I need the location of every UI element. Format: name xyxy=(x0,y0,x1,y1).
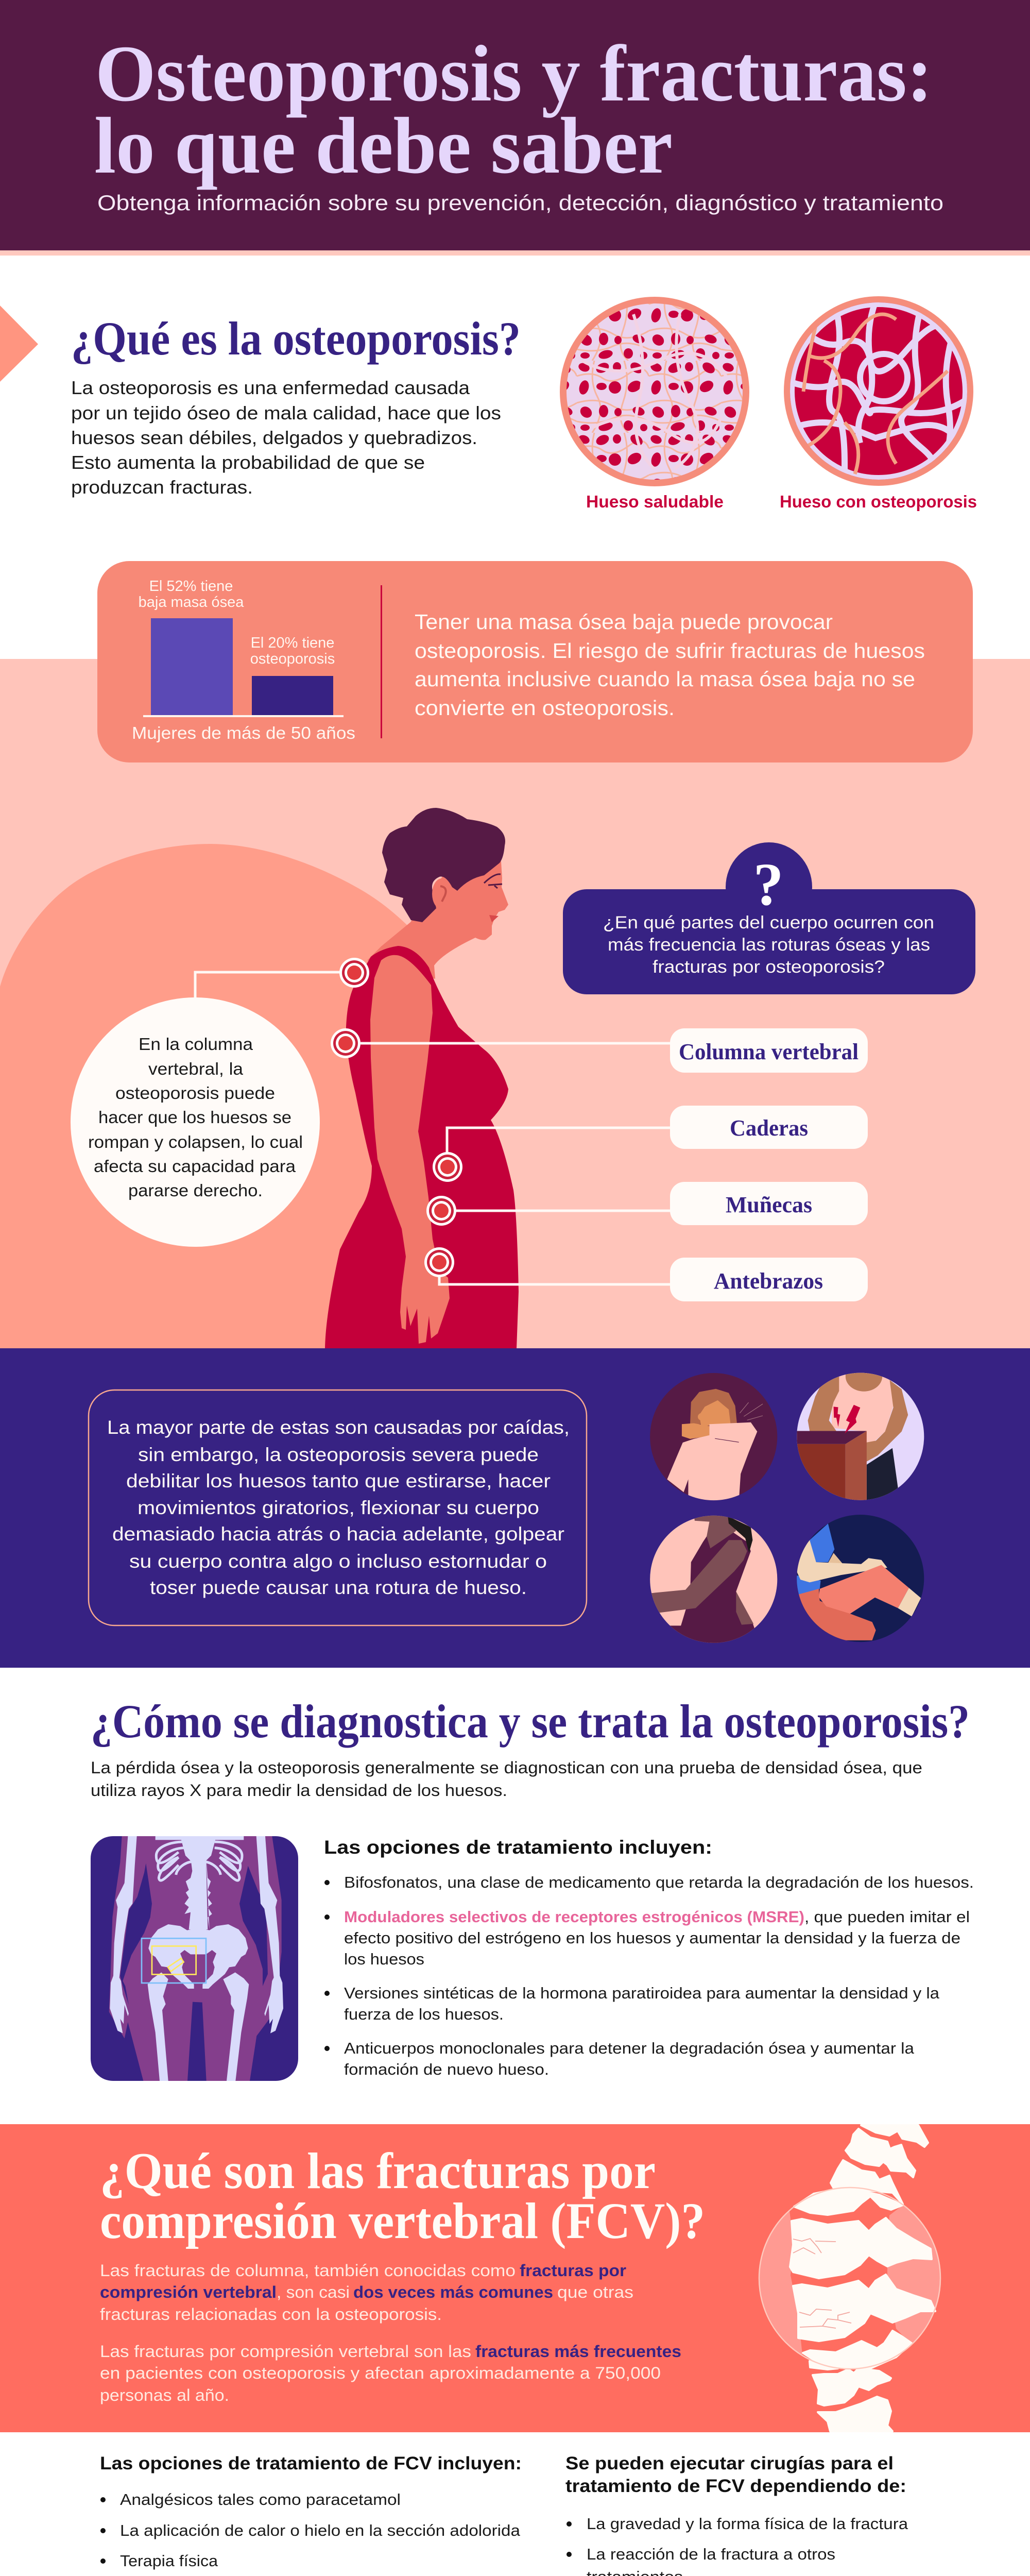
bar chart: women over 50: El 52% tiene xyxy=(149,578,233,595)
list: FCV treatment options xyxy=(100,2453,522,2576)
question panel: ¿En qué partes del cuerpo ocurren con xyxy=(603,913,934,933)
diagnosis paragraph xyxy=(91,1758,922,1800)
outlined text box xyxy=(89,1390,587,1625)
definition paragraph: por un tejido óseo de mala calidad, hace que los xyxy=(71,402,501,423)
ear xyxy=(432,878,452,909)
treatment options: Moduladores selectivos de receptores estrogénicos (MSRE) xyxy=(344,1908,804,1926)
femurs xyxy=(148,1972,168,2081)
illustration: spine with magnifier xyxy=(759,2125,940,2431)
outlined text box: sin embargo, la osteoporosis severa puede xyxy=(138,1444,539,1465)
hair xyxy=(382,808,505,922)
outlined text box: toser puede causar una rotura de hueso. xyxy=(150,1577,527,1598)
list: surgery criteria xyxy=(565,2453,908,2576)
target markers xyxy=(331,958,462,1277)
question panel xyxy=(563,842,975,994)
illustration: holding knee xyxy=(795,1513,928,1645)
spine callout circle: hacer que los huesos se xyxy=(98,1108,291,1127)
illustration: skeleton x-ray xyxy=(91,1836,298,2081)
illustration: osteoporotic bone xyxy=(784,296,973,493)
label: columna vertebral: Columna vertebral xyxy=(679,1039,859,1064)
treatment options: , que pueden imitar el xyxy=(804,1908,970,1926)
label: caderas: Caderas xyxy=(730,1115,808,1141)
diagnosis paragraph: La pérdida ósea y la osteoporosis generalmente se diagnostican con una prueba de densidad ósea, que xyxy=(91,1758,922,1777)
arm xyxy=(370,955,450,1344)
spine callout circle: En la columna xyxy=(139,1035,253,1054)
bar chart: women over 50: El 20% tiene xyxy=(251,635,334,651)
pelvis xyxy=(148,1924,248,1989)
background hill xyxy=(0,844,412,1348)
FCV paragraphs: Las fracturas de columna, también conocidas como xyxy=(100,2261,516,2280)
FCV paragraphs: , son casi xyxy=(277,2283,350,2301)
treatment options: formación de nuevo hueso. xyxy=(344,2060,549,2078)
list: surgery criteria: tratamiento de FCV dependiendo de: xyxy=(565,2476,906,2496)
treatment options: Versiones sintéticas de la hormona paratiroidea para aumentar la densidad y la xyxy=(344,1984,940,2002)
treatment options: Anticuerpos monoclonales para detener la degradación ósea y aumentar la xyxy=(344,2039,915,2057)
FCV paragraphs: personas al año. xyxy=(100,2386,229,2404)
definition paragraph: La osteoporosis es una enfermedad causada xyxy=(71,377,470,398)
FCV paragraphs: fracturas por xyxy=(520,2261,626,2280)
spine callout circle: pararse derecho. xyxy=(128,1181,263,1200)
header banner xyxy=(0,0,1030,256)
treatment options: Bifosfonatos, una clase de medicamento que retarda la degradación de los huesos. xyxy=(344,1873,974,1891)
scan frames xyxy=(142,1938,206,1983)
label: munecas xyxy=(670,1182,868,1225)
callout text: osteoporosis. El riesgo de sufrir fracturas de huesos xyxy=(415,639,925,663)
body part labels xyxy=(670,1028,868,1301)
illustration: woman in profile xyxy=(325,808,519,1349)
label: columna vertebral xyxy=(670,1028,868,1073)
FCV paragraphs: compresión vertebral xyxy=(100,2283,277,2301)
neck and face xyxy=(367,855,508,979)
heading: FCV: ¿Qué son las fracturas por xyxy=(100,2142,656,2199)
label: caderas xyxy=(670,1106,868,1149)
FCV paragraphs: fracturas más frecuentes xyxy=(475,2342,681,2361)
bone labels: Hueso con osteoporosis xyxy=(780,492,977,511)
list: FCV treatment options: Las opciones de tratamiento de FCV incluyen: xyxy=(100,2453,522,2473)
callout text: Tener una masa ósea baja puede provocar xyxy=(415,610,833,634)
callout text: aumenta inclusive cuando la masa ósea baja no se xyxy=(415,667,915,691)
treatment options: los huesos xyxy=(344,1950,424,1968)
definition paragraph: produzcan fracturas. xyxy=(71,477,253,498)
list: FCV treatment options: Terapia física xyxy=(120,2552,218,2570)
outlined text box: demasiado hacia atrás o hacia adelante, golpear xyxy=(112,1523,564,1545)
list: FCV treatment options: Analgésicos tales como paracetamol xyxy=(120,2490,401,2509)
subtitle: Obtenga información sobre su prevención, detección, diagnóstico y tratamiento xyxy=(97,191,943,215)
spine callout circle: vertebral, la xyxy=(148,1059,244,1078)
diagnosis paragraph: utiliza rayos X para medir la densidad de los huesos. xyxy=(91,1781,507,1800)
question panel: más frecuencia las roturas óseas y las xyxy=(608,935,930,955)
title xyxy=(94,29,933,190)
title: lo que debe saber xyxy=(94,101,673,190)
label: munecas: Muñecas xyxy=(726,1192,812,1217)
panel: causes xyxy=(0,1348,1030,1668)
treatment options: Las opciones de tratamiento incluyen: xyxy=(324,1837,712,1858)
heading: FCV xyxy=(100,2142,705,2249)
callout text: convierte en osteoporosis. xyxy=(415,696,675,720)
callout text xyxy=(415,610,925,720)
outlined text box: La mayor parte de estas son causadas por caídas, xyxy=(107,1417,570,1438)
outlined text box: su cuerpo contra algo o incluso estornudar o xyxy=(129,1551,547,1572)
icon: question mark: ? xyxy=(753,851,784,918)
illustration: coughing woman xyxy=(648,1371,780,1503)
illustration: hitting a table xyxy=(797,1372,924,1500)
definition paragraph: Esto aumenta la probabilidad de que se xyxy=(71,452,425,473)
panel: low bone mass xyxy=(97,561,973,762)
list: surgery criteria: La gravedad y la forma física de la fractura xyxy=(587,2515,908,2533)
FCV paragraphs xyxy=(100,2261,681,2404)
outlined text box: debilitar los huesos tanto que estirarse, hacer xyxy=(126,1470,551,1492)
FCV paragraphs: dos veces más comunes xyxy=(353,2283,553,2301)
treatment options xyxy=(324,1837,974,2078)
illustration: healthy bone xyxy=(560,297,749,486)
panel: vertebral compression fractures xyxy=(0,2124,1030,2432)
illustrations: four causes xyxy=(648,1361,928,1645)
definition paragraph xyxy=(71,377,501,498)
dress xyxy=(325,946,519,1349)
spine callout circle: osteoporosis puede xyxy=(115,1083,275,1103)
eye and lips xyxy=(484,874,502,888)
heading: que es la osteoporosis: ¿Qué es la osteoporosis? xyxy=(71,312,521,365)
pink section background xyxy=(0,659,1030,1348)
illustration: sore back xyxy=(648,1513,780,1645)
treatment options: fuerza de los huesos. xyxy=(344,2005,504,2023)
FCV paragraphs: en pacientes con osteoporosis y afectan aproximadamente a 750,000 xyxy=(100,2364,661,2382)
spine callout circle xyxy=(71,997,320,1247)
treatment options: efecto positivo del estrógeno en los huesos y aumentar la densidad y la fuerza de xyxy=(344,1929,960,1947)
list: FCV treatment options: La aplicación de calor o hielo en la sección adolorida xyxy=(120,2521,521,2539)
spine callout circle: afecta su capacidad para xyxy=(94,1157,296,1176)
FCV paragraphs: que otras xyxy=(557,2283,633,2301)
connector lines xyxy=(195,972,672,1284)
label: antebrazos xyxy=(670,1258,868,1301)
spine callout circle: rompan y colapsen, lo cual xyxy=(88,1132,303,1151)
outlined text box: movimientos giratorios, flexionar su cuerpo xyxy=(138,1497,539,1518)
bar chart: women over 50: osteoporosis xyxy=(250,651,335,667)
bone labels xyxy=(586,492,977,511)
list: surgery criteria: Se pueden ejecutar cirugías para el xyxy=(565,2453,894,2473)
list: surgery criteria: La reacción de la fractura a otros xyxy=(587,2545,835,2563)
bar chart: women over 50: baja masa ósea xyxy=(139,594,244,611)
section marker arrow xyxy=(0,306,38,382)
question panel: fracturas por osteoporosis? xyxy=(653,957,885,977)
FCV paragraphs: Las fracturas por compresión vertebral son las xyxy=(100,2342,471,2361)
heading: diagnostico: ¿Cómo se diagnostica y se trata la osteoporosis? xyxy=(91,1695,970,1748)
title: Osteoporosis y fracturas: xyxy=(95,29,933,118)
heading: FCV: compresión vertebral (FCV)? xyxy=(100,2192,705,2249)
bar chart: women over 50 xyxy=(132,578,355,742)
definition paragraph: huesos sean débiles, delgados y quebradizos. xyxy=(71,427,477,448)
bone labels: Hueso saludable xyxy=(586,492,724,511)
bar chart: women over 50: Mujeres de más de 50 años xyxy=(132,723,355,742)
label: antebrazos: Antebrazos xyxy=(714,1268,823,1294)
FCV paragraphs: fracturas relacionadas con la osteoporosis. xyxy=(100,2305,442,2324)
